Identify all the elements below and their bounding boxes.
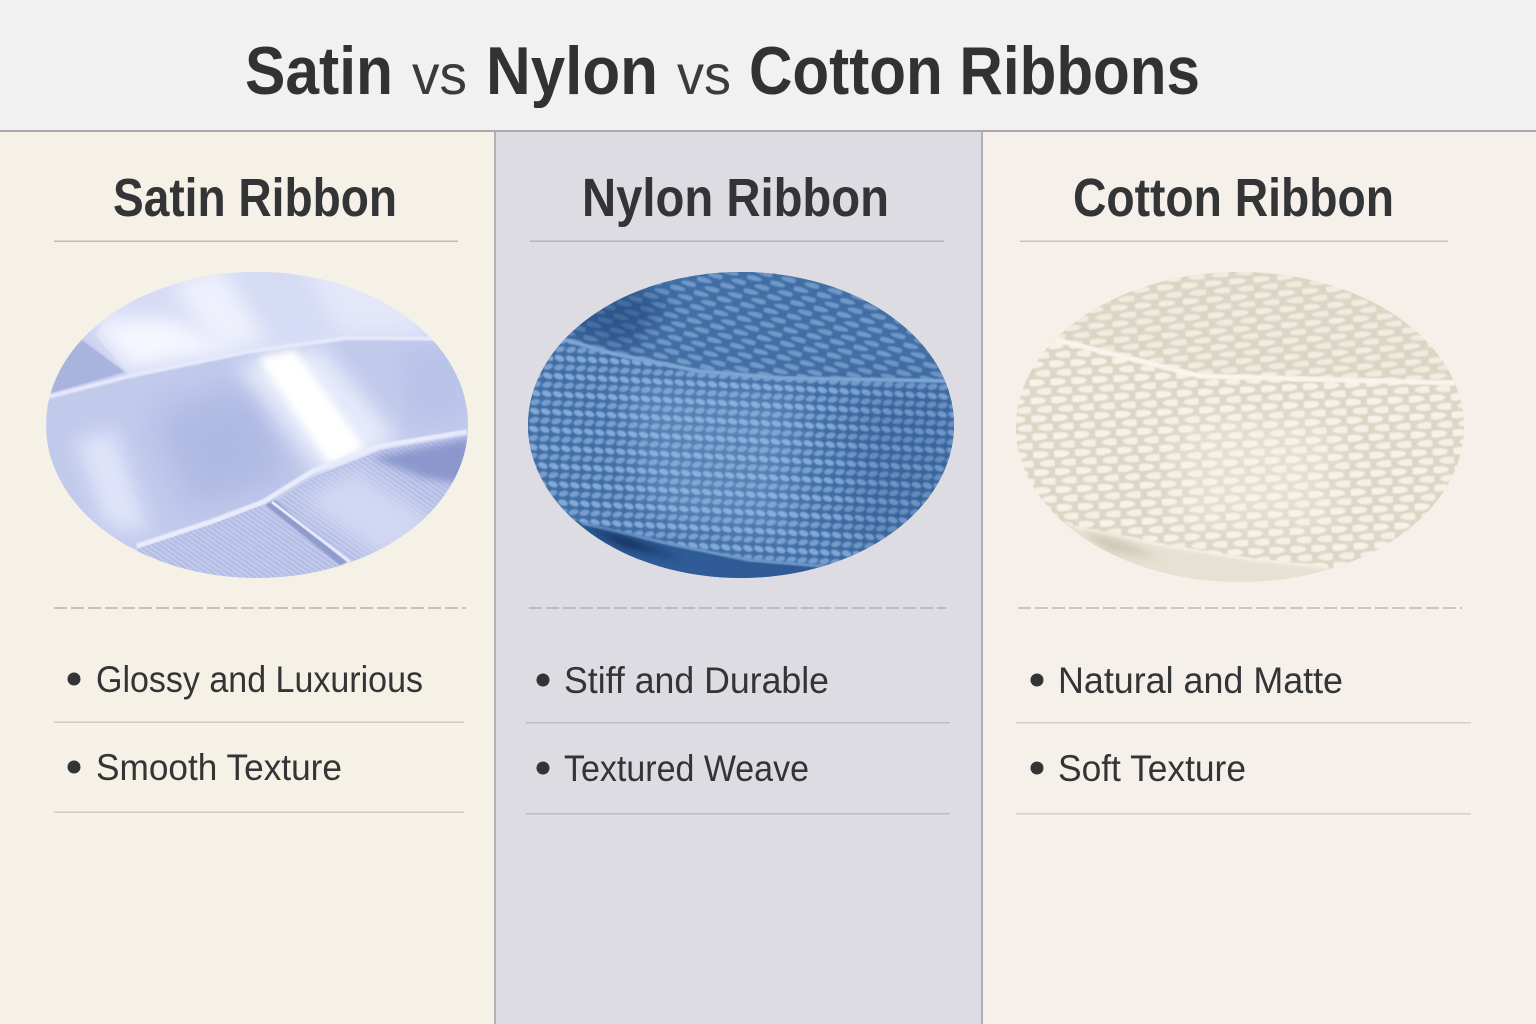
bullet: stiff and durable: Stiff and Durable: [564, 660, 829, 701]
bullet: soft texture: Soft Texture: [1058, 748, 1246, 789]
dashed divider: [54, 607, 466, 609]
panel: satin ribbon: [46, 177, 468, 813]
bullet: textured weave: Textured Weave: [564, 748, 809, 789]
header band: [0, 0, 1536, 131]
title: Satin: [245, 33, 393, 109]
bullet: smooth texture: Smooth Texture: [96, 747, 342, 788]
panel: nylon ribbon: [494, 132, 983, 1024]
title: Nylon: [486, 33, 658, 109]
title: Cotton Ribbons: [749, 33, 1200, 109]
heading: nylon ribbon: Nylon Ribbon: [582, 168, 889, 228]
heading: satin ribbon: Satin Ribbon: [113, 168, 397, 228]
image: nylon ribbon swatch: [520, 265, 965, 585]
dashed divider: [1018, 607, 1462, 609]
title: [245, 33, 1200, 109]
heading: cotton ribbon: Cotton Ribbon: [1073, 168, 1394, 228]
panel: cotton ribbon: [1016, 177, 1471, 814]
image: satin ribbon swatch: [40, 265, 475, 585]
dashed divider: [529, 607, 946, 609]
bullet: natural and matte: Natural and Matte: [1058, 660, 1343, 701]
title: vs: [677, 43, 731, 106]
image: cotton ribbon swatch: [1010, 265, 1470, 590]
bullet: glossy and luxurious: Glossy and Luxurious: [96, 659, 423, 700]
title: vs: [412, 43, 467, 106]
